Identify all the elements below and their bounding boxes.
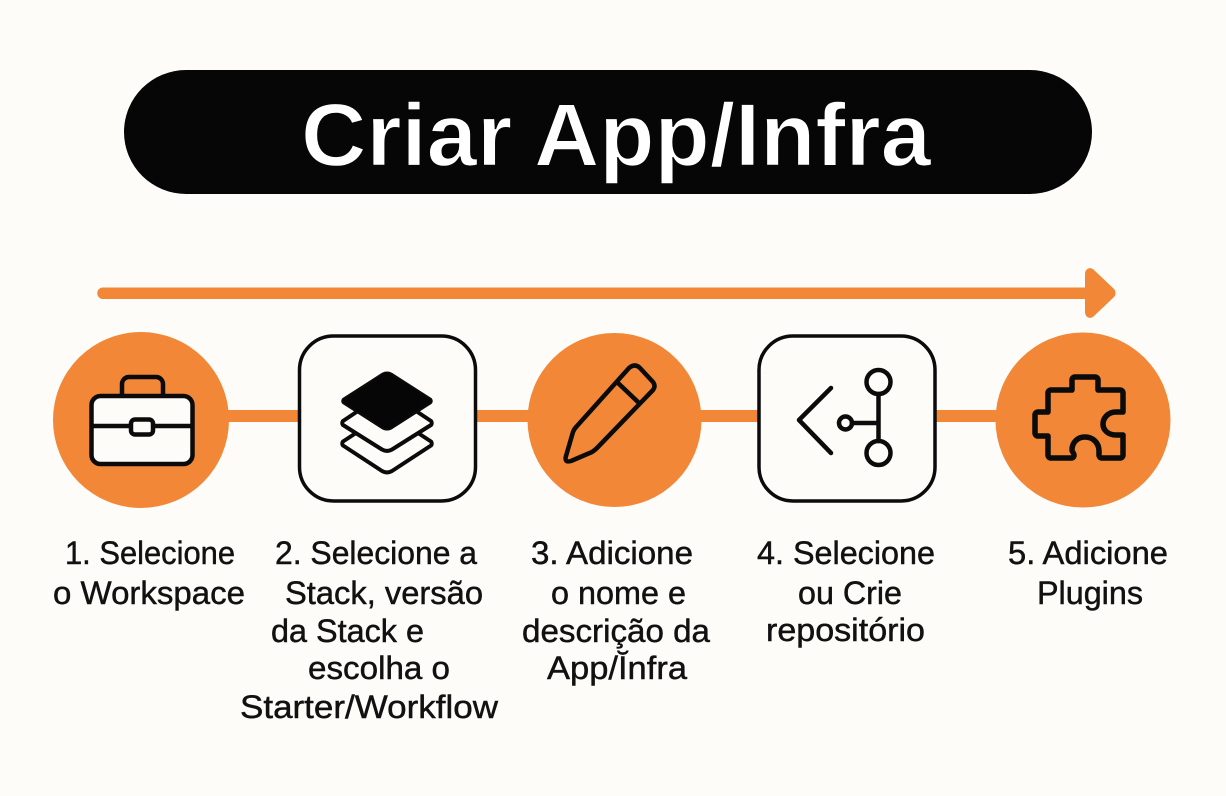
label: step 2: da Stack e — [271, 613, 424, 649]
step 2 — [240, 336, 499, 725]
label: step 4: ou Crie — [798, 575, 902, 611]
label: step 4: 4. Selecione — [757, 535, 935, 571]
step 4 — [757, 336, 935, 648]
title: Criar App/Infra — [301, 84, 933, 184]
icon: layers — [342, 372, 432, 472]
label: step 5: Plugins — [1037, 575, 1143, 611]
step 5 — [996, 332, 1170, 611]
circle: step 3 — [528, 333, 702, 507]
label: step 3: o nome e — [551, 575, 686, 611]
circle: step 5 — [996, 332, 1170, 508]
label: step 1: o Workspace — [53, 575, 245, 611]
connector line between steps — [200, 410, 1050, 422]
icon: briefcase — [92, 377, 192, 464]
label: step 2: Stack, versão — [285, 575, 483, 611]
label: step 4: repositório — [766, 612, 925, 648]
icon: code repository branch — [799, 370, 890, 465]
label: step 3: descrição da — [522, 613, 710, 649]
icon: puzzle piece — [1035, 377, 1123, 458]
label: step 3: 3. Adicione — [531, 535, 693, 571]
label: step 3 — [522, 535, 710, 686]
label: step 5 — [1008, 535, 1168, 611]
label: step 2: 2. Selecione a — [275, 535, 477, 571]
label: step 2: Starter/Workflow — [240, 689, 499, 725]
card: step 2 — [300, 336, 476, 501]
label: step 2 — [240, 535, 499, 725]
label: step 3: App/Ĭnfra — [547, 650, 687, 686]
circle: step 1 — [53, 332, 229, 508]
arrow: process direction — [97, 268, 1116, 318]
step 1 — [53, 332, 245, 611]
label: step 1 — [53, 535, 245, 611]
step 3 — [522, 333, 710, 686]
card: step 4 — [759, 336, 935, 501]
label: step 5: 5. Adicione — [1008, 535, 1168, 571]
label: step 1: 1. Selecione — [65, 535, 235, 571]
title — [124, 70, 1092, 194]
icon: pencil — [566, 366, 654, 461]
label: step 4 — [757, 535, 935, 648]
label: step 2: escolha o — [308, 650, 450, 686]
